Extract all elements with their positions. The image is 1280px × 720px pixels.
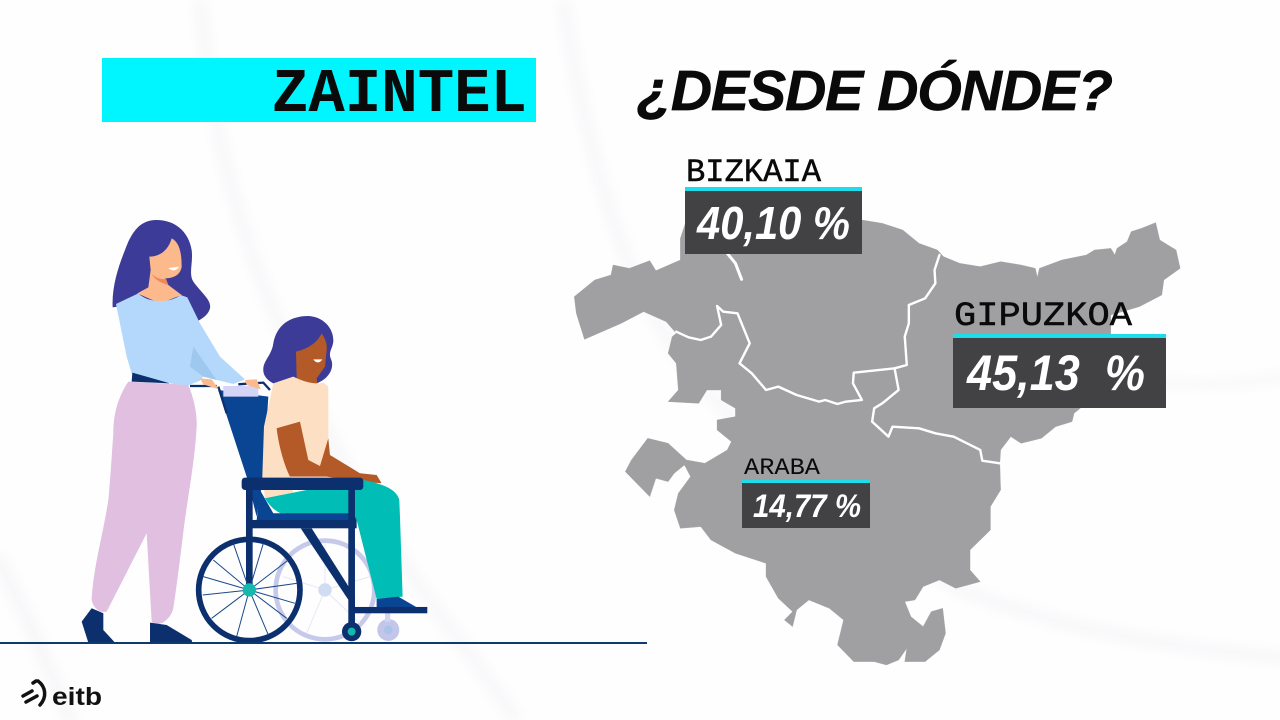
label: Gipuzkoa (953, 298, 1166, 408)
label: Bizkaia: 40,10 % (696, 197, 850, 249)
wheelchair frame (242, 478, 427, 633)
title: ZAINTEL: ZAINTEL (272, 59, 527, 130)
wheelchair back (190, 378, 270, 517)
back wheel (276, 541, 399, 641)
border: stub (727, 253, 742, 279)
woman seated (262, 316, 417, 607)
border: Gipuzkoa-Araba (872, 368, 1000, 463)
label: Gipuzkoa: 45,13 % (966, 345, 1145, 401)
label: Araba: 14,77 % (753, 488, 861, 524)
label: Araba (742, 455, 870, 528)
label: Gipuzkoa: GIPUZKOA (954, 298, 1133, 336)
logo: eitb: eitb (52, 683, 102, 711)
front wheel (199, 539, 361, 641)
heading: ¿Desde dónde?: ¿DESDE DÓNDE? (637, 59, 1113, 123)
illustration: carer pushing wheelchair (82, 220, 427, 643)
ground line (0, 642, 647, 644)
logo: eitb (23, 681, 102, 711)
label: Bizkaia: BIZKAIA (686, 154, 822, 191)
label: Bizkaia (685, 154, 862, 254)
label: Araba: ARABA (744, 455, 820, 481)
title: ZAINTEL (102, 58, 536, 130)
woman standing (82, 220, 245, 643)
map: Basque Country provinces (574, 220, 1180, 665)
border: Bizkaia (676, 255, 939, 404)
